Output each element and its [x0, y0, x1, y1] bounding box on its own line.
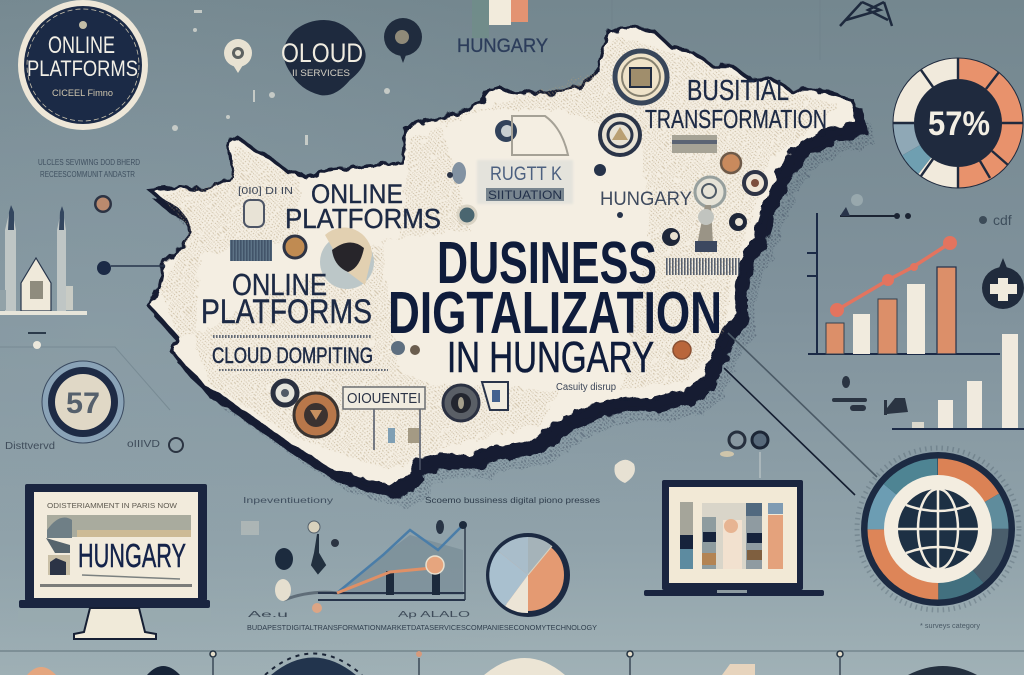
pin icon dark	[384, 18, 422, 63]
title: IN HUNGARY	[447, 333, 654, 382]
globe emblem	[857, 448, 1019, 610]
heading: Busitial Transformation: BUSITIAL	[687, 75, 789, 107]
badge: 57	[42, 361, 124, 443]
badge: Online Platforms: CICEEL Fimno	[52, 88, 113, 98]
text: Online Platforms 1: ONLINE	[311, 179, 403, 209]
text: Cloud Computing: CLOUD DOMPITING	[212, 343, 373, 368]
title	[388, 230, 722, 382]
small map text: Casuity disrup	[556, 382, 616, 393]
title: DIGTALIZATION	[388, 280, 722, 346]
small text left: RECEESCOMMUNIT ANDASTR	[40, 170, 135, 179]
line chart	[241, 496, 600, 632]
node dots	[94, 195, 165, 275]
small icons left	[5, 438, 183, 452]
map halo stipple	[168, 49, 875, 509]
blob badge: Cloud	[281, 20, 366, 95]
icon: cream pebble	[614, 460, 635, 483]
label: digital box: RUGTT K	[490, 164, 562, 185]
small icons left: Disttvervd	[5, 441, 55, 452]
connector lines from map	[724, 333, 877, 495]
bottom row: pins and partial icons	[0, 651, 1024, 675]
small map text: [0I0] DI IN	[238, 186, 293, 197]
badge: 57: 57	[66, 387, 100, 420]
label: digital box	[477, 160, 573, 204]
laptop	[644, 480, 824, 596]
text: Online Platforms 1	[285, 179, 441, 234]
label: Hungary map text: HUNGARY	[600, 189, 692, 210]
monitor: Hungary	[18, 484, 211, 639]
pie chart	[489, 536, 567, 614]
pin icon left	[224, 39, 252, 73]
small connector icons	[720, 432, 768, 478]
blob badge: Cloud: OLOUD	[281, 38, 363, 68]
barcode	[665, 258, 740, 275]
connector left	[28, 333, 46, 349]
small icons upper right: cdf	[993, 212, 1012, 228]
label: Hungary top: HUNGARY	[457, 36, 548, 57]
small text left: ULCLES SEVIWING DOD BHERD	[38, 158, 140, 167]
donut chart: 57%: 57%	[928, 105, 990, 143]
heading: Busitial Transformation	[645, 75, 827, 134]
monitor: Hungary: HUNGARY	[78, 537, 186, 574]
blob badge: Cloud: II SERVICES	[292, 68, 350, 78]
map of Hungary	[150, 27, 857, 487]
line chart: Ap ALALO	[398, 610, 470, 619]
small icons left: oIIIVD	[127, 439, 160, 450]
line chart: Ae.u	[248, 610, 288, 619]
line chart: Scoemo bussiness digital piono presses	[425, 496, 600, 505]
line chart: BUDAPESTDIGITALTRANSFORMATIONMARKETDATASERVICESCOMPANIESECONOMYTECHNOLOGY	[247, 625, 597, 632]
text: Online Platforms 1: PLATFORMS	[285, 203, 441, 234]
pin icon right	[982, 258, 1024, 309]
flag of Hungary	[472, 0, 528, 38]
label: digital box: SIITUATION	[488, 188, 562, 202]
bar chart lower right	[892, 334, 1024, 429]
text: Online Platforms 2	[201, 267, 372, 331]
small map text	[238, 186, 616, 393]
bar chart with trend line	[807, 213, 1000, 354]
badge: Online Platforms: ONLINE	[48, 32, 115, 59]
text: small rule lines	[212, 335, 388, 371]
small text left	[38, 158, 140, 179]
title: DUSINESS	[437, 230, 657, 296]
text: Online Platforms 2: ONLINE	[232, 267, 327, 302]
small icons near chart	[832, 376, 908, 415]
scattered specks	[172, 10, 390, 145]
heading: Busitial Transformation: TRANSFORMATION	[645, 104, 827, 134]
monitor: Hungary: ODISTERIAMMENT IN PARIS NOW	[47, 503, 177, 510]
line chart: Inpeventiuetiony	[243, 496, 333, 505]
donut chart: 57%	[892, 58, 1024, 188]
small icons upper right	[840, 194, 1012, 228]
small label under globe: * surveys category	[920, 623, 981, 630]
badge: Online Platforms: PLATFORMS	[27, 56, 138, 81]
text: Online Platforms 2: PLATFORMS	[201, 293, 372, 331]
icon cluster: map icons	[230, 51, 766, 470]
icon: tower	[840, 2, 892, 26]
label: Objective box: OIOUENTEI	[347, 390, 421, 407]
icon: church	[0, 205, 87, 315]
map shadow	[158, 37, 865, 497]
badge: Online Platforms	[18, 0, 148, 130]
